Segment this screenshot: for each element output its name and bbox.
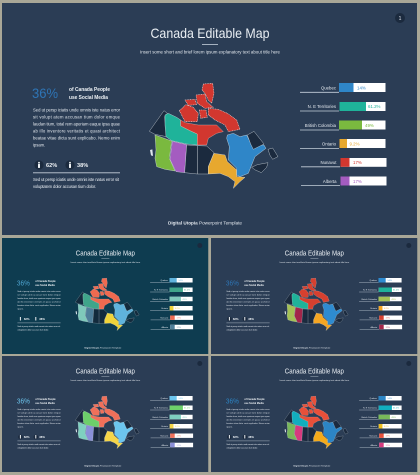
paragraph: Sed ut persp iciatis unde omnis iste natus error	[33, 108, 121, 112]
subtitle: Insert some short and brief lorem ipsum explanatory text about title here	[140, 50, 281, 54]
thumbnail paragraph: ab illo inventore veritatis et quasi architect	[226, 419, 270, 422]
map of Canada	[149, 83, 278, 188]
bar: N. E Territories	[300, 102, 386, 111]
panel: slide thumbnail vivid	[211, 356, 417, 472]
thumbnail bars	[359, 278, 402, 329]
thumbnail bars: 9.2%	[175, 426, 180, 428]
thumbnail paragraph: beatae vitae dicta sunt explicabo. Nemo enim	[226, 422, 270, 425]
thumbnail bars: 14%	[178, 280, 183, 282]
bar: British Colombia: 49%	[365, 123, 374, 128]
paragraph: laudan tium, total rem aperiam eaque ipsa quae	[33, 122, 121, 126]
thumbnail bars: British Colombia	[153, 416, 169, 419]
thumbnail bars: 9.2%	[384, 426, 389, 428]
thumbnail statistic	[226, 397, 265, 406]
thumbnail gender statistics	[20, 317, 45, 321]
panel: slide thumbnail vivid: Insert some short and brief lorem ipsum explanatory text about title here	[280, 379, 350, 382]
thumbnail title: Canada Editable Map	[76, 250, 135, 258]
thumbnail statistic: of Canada People	[35, 397, 56, 401]
thumbnail gender statistics: 62%	[24, 317, 30, 321]
panel: slide thumbnail teal: Sed ut persp iciatis unde omnis iste natus error sit	[17, 325, 61, 328]
page number badge	[395, 13, 405, 23]
bar: Nunavut	[301, 158, 386, 167]
thumbnail bars: 49%	[391, 417, 396, 419]
thumbnail bars: Quebec	[370, 280, 377, 282]
statistic: 36%: 36%	[32, 85, 58, 101]
thumbnail bars: 61.2%	[184, 289, 190, 292]
thumbnail bars: N. E Territories	[154, 288, 168, 292]
thumbnail paragraph: laudan tium, total rem aperiam eaque ipsa quae	[17, 297, 61, 300]
thumbnail paragraph: laudan tium, total rem aperiam eaque ipsa quae	[226, 415, 270, 418]
thumbnail bars: 49%	[182, 417, 187, 419]
thumbnail paragraph: Sed ut persp iciatis unde omnis iste natus error	[226, 408, 270, 411]
title: Canada Editable Map	[150, 25, 270, 41]
thumbnail statistic: 36%	[226, 398, 239, 406]
thumbnail bars: 49%	[391, 299, 396, 301]
thumbnail paragraph: beatae vitae dicta sunt explicabo. Nemo enim	[17, 422, 61, 425]
thumbnail statistic: use Social Media	[35, 283, 55, 287]
page number badge: 1	[399, 16, 402, 22]
thumbnail bars	[150, 278, 193, 329]
thumbnail map	[75, 396, 139, 449]
thumbnail bars: Nunavut	[369, 434, 378, 438]
panel: slide thumbnail vivid: voluptatem dolor accusan tium dolor.	[226, 446, 258, 450]
statistic: 36%: use Social Media	[69, 95, 108, 101]
bar: Ontario: 9.2%	[350, 142, 360, 146]
panel: slide thumbnail teal: voluptatem dolor accusan tium dolor.	[17, 328, 49, 332]
panel: slide thumbnail pastel: voluptatem dolor accusan tium dolor.	[17, 446, 49, 450]
thumbnail bars: 17%	[176, 435, 181, 438]
thumbnail bars: Nunavut	[160, 316, 169, 320]
statistic: 36%	[32, 85, 110, 101]
thumbnail footer: Digital Utopia Powerpoint Template	[85, 347, 122, 350]
thumbnail paragraph: ab illo inventore veritatis et quasi architect	[17, 301, 61, 304]
bar: Nunavut: Nunavut	[320, 160, 337, 165]
thumbnail paragraph: beatae vitae dicta sunt explicabo. Nemo enim	[17, 304, 61, 307]
thumbnail gender statistics: 38%	[39, 435, 45, 439]
thumbnail paragraph: sit volupt atem accusan tium dolor emque	[226, 412, 270, 415]
panel: slide thumbnail navy and maroon: voluptatem dolor accusan tium dolor.	[226, 328, 258, 332]
thumbnail bars: 49%	[182, 299, 187, 301]
thumbnail map	[284, 396, 348, 449]
thumbnail bars: Nunavut	[369, 316, 378, 320]
footnote text: voluptatem dolor accusan tium dolor.	[33, 184, 96, 189]
thumbnail paragraph: Sed ut persp iciatis unde omnis iste natus error	[17, 290, 61, 293]
thumbnail bars: 9.2%	[384, 308, 389, 310]
thumbnail paragraph: laudan tium, total rem aperiam eaque ipsa quae	[226, 297, 270, 300]
bar: Alberta: Alberta	[323, 179, 337, 184]
panel: slide thumbnail pastel: Sed ut persp iciatis unde omnis iste natus error sit	[17, 443, 61, 446]
panel: main slide	[2, 3, 417, 235]
thumbnail bars: N. E Territories	[363, 406, 377, 410]
thumbnail paragraph: ipsam.	[17, 309, 24, 311]
thumbnail paragraph	[226, 290, 270, 311]
thumbnail bars: Alberta	[371, 444, 378, 447]
thumbnail bars: British Colombia	[362, 298, 378, 301]
thumbnail paragraph: sit volupt atem accusan tium dolor emque	[226, 294, 270, 297]
thumbnail bars: 17%	[176, 445, 181, 447]
thumbnail paragraph: ipsam.	[17, 427, 24, 429]
thumbnail bars: 14%	[387, 398, 392, 400]
thumbnail paragraph: beatae vitae dicta sunt explicabo. Nemo enim	[226, 304, 270, 307]
thumbnail statistic	[17, 279, 56, 288]
thumbnail bars: 17%	[385, 435, 390, 438]
thumbnail statistic: of Canada People	[244, 397, 265, 401]
thumbnail statistic: 36%	[17, 280, 30, 288]
statistic: 36%: of Canada People	[69, 87, 110, 93]
thumbnail bars: Ontario	[161, 307, 169, 310]
thumbnail bars: 9.2%	[175, 308, 180, 310]
thumbnail paragraph: sit volupt atem accusan tium dolor emque	[17, 294, 61, 297]
thumbnail bars: Quebec	[161, 280, 168, 282]
thumbnail gender statistics: 62%	[233, 435, 239, 439]
thumbnail gender statistics: 38%	[248, 317, 254, 321]
thumbnail bars: 61.2%	[184, 407, 190, 410]
panel: slide thumbnail vivid: Sed ut persp iciatis unde omnis iste natus error sit	[226, 443, 270, 446]
panel: slide thumbnail navy and maroon	[211, 238, 417, 354]
thumbnail bars: Alberta	[162, 444, 169, 447]
thumbnail statistic: use Social Media	[35, 401, 55, 405]
thumbnail bars: Ontario	[161, 425, 169, 428]
thumbnail gender statistics: 62%	[233, 317, 239, 321]
thumbnail statistic: use Social Media	[244, 401, 264, 405]
bar list	[300, 83, 386, 186]
thumbnail bars: Ontario	[370, 425, 378, 428]
thumbnail paragraph: ipsam.	[226, 309, 233, 311]
thumbnail bars: 17%	[385, 327, 390, 329]
thumbnail map	[75, 278, 139, 331]
thumbnail title: Canada Editable Map	[285, 368, 344, 376]
footnote text: Sed ut persp iciatis unde omnis iste natus error sit	[33, 177, 120, 182]
panel: slide thumbnail navy and maroon: Sed ut persp iciatis unde omnis iste natus error sit	[226, 325, 270, 328]
thumbnail paragraph	[226, 408, 270, 429]
thumbnail bars: N. E Territories	[363, 288, 377, 292]
paragraph	[33, 108, 121, 148]
panel: slide thumbnail pastel	[2, 356, 208, 472]
thumbnail title: Canada Editable Map	[285, 250, 344, 258]
thumbnail footer: Digital Utopia Powerpoint Template	[294, 465, 331, 468]
thumbnail bars	[359, 396, 402, 447]
bar: Alberta: 17%	[353, 179, 362, 184]
thumbnail footer: Digital Utopia Powerpoint Template	[85, 465, 122, 468]
bar: British Colombia: British Colombia	[305, 123, 337, 128]
bar: Ontario	[300, 139, 386, 148]
thumbnail statistic: 36%	[17, 398, 30, 406]
thumbnail bars: 17%	[385, 317, 390, 320]
thumbnail paragraph: laudan tium, total rem aperiam eaque ipsa quae	[17, 415, 61, 418]
bar: Ontario: Ontario	[322, 142, 337, 146]
thumbnail bars: Nunavut	[160, 434, 169, 438]
thumbnail gender statistics	[227, 435, 254, 439]
thumbnail paragraph	[17, 290, 61, 311]
thumbnail bars: 17%	[385, 445, 390, 447]
paragraph: ipsam.	[33, 142, 45, 148]
gender statistics: 62%	[46, 163, 57, 169]
thumbnail bars: British Colombia	[362, 416, 378, 419]
thumbnail bars: Ontario	[370, 307, 378, 310]
gender statistics: 38%	[77, 163, 88, 169]
panel: slide thumbnail teal	[2, 238, 208, 354]
thumbnail bars	[150, 396, 193, 447]
footnote text	[33, 177, 120, 189]
thumbnail bars: 17%	[176, 327, 181, 329]
bar: N. E Territories: 61.2%	[368, 104, 381, 109]
thumbnail statistic	[226, 279, 265, 288]
paragraph: ab illo inventore veritatis et quasi architect	[33, 128, 121, 134]
thumbnail statistic	[17, 397, 56, 406]
paragraph: beatae vitae dicta sunt explicabo. Nemo enim	[33, 136, 120, 140]
thumbnail footer: Digital Utopia Powerpoint Template	[294, 347, 331, 350]
bar: Quebec: Quebec	[321, 86, 337, 90]
thumbnail statistic: use Social Media	[244, 283, 264, 287]
thumbnail bars: Alberta	[371, 326, 378, 329]
thumbnail bars: N. E Territories	[154, 406, 168, 410]
thumbnail paragraph: ab illo inventore veritatis et quasi architect	[226, 301, 270, 304]
thumbnail bars: British Colombia	[153, 298, 169, 301]
thumbnail bars: Quebec	[161, 398, 168, 400]
thumbnail paragraph: Sed ut persp iciatis unde omnis iste natus error	[17, 408, 61, 411]
bar: Quebec: 14%	[357, 86, 366, 90]
thumbnail paragraph	[17, 408, 61, 429]
thumbnail bars: 61.2%	[393, 289, 399, 292]
thumbnail statistic: 36%	[226, 280, 239, 288]
bar: Alberta	[301, 176, 386, 186]
bar: N. E Territories: N. E Territories	[308, 104, 336, 109]
thumbnail gender statistics: 62%	[24, 435, 30, 439]
thumbnail gender statistics: 38%	[39, 317, 45, 321]
thumbnail title: Canada Editable Map	[76, 368, 135, 376]
thumbnail statistic: of Canada People	[35, 279, 56, 283]
thumbnail bars: Quebec	[370, 398, 377, 400]
thumbnail statistic: of Canada People	[244, 279, 265, 283]
thumbnail paragraph: Sed ut persp iciatis unde omnis iste natus error	[226, 290, 270, 293]
thumbnail bars: Alberta	[162, 326, 169, 329]
thumbnail paragraph: sit volupt atem accusan tium dolor emque	[17, 412, 61, 415]
thumbnail gender statistics	[18, 435, 45, 439]
gender statistics	[34, 160, 88, 170]
panel: slide thumbnail pastel: Insert some short and brief lorem ipsum explanatory text about title here	[71, 379, 141, 382]
thumbnail bars: 61.2%	[393, 407, 399, 410]
thumbnail bars: 17%	[176, 317, 181, 320]
panel: slide thumbnail navy and maroon: Insert some short and brief lorem ipsum explanatory text about title here	[280, 261, 350, 264]
thumbnail gender statistics: 38%	[248, 435, 254, 439]
footer: Digital Utopia Powerpoint Template	[168, 220, 243, 226]
thumbnail paragraph: ab illo inventore veritatis et quasi architect	[17, 419, 61, 422]
bar: Nunavut: 17%	[353, 160, 362, 165]
bar: British Colombia	[300, 120, 386, 130]
thumbnail bars: 14%	[178, 398, 183, 400]
thumbnail gender statistics	[227, 317, 254, 321]
bar: Quebec	[300, 83, 386, 92]
paragraph: sit volupt atem accusan tium dolor emque	[33, 114, 121, 120]
thumbnail paragraph: ipsam.	[226, 427, 233, 429]
thumbnail bars: 14%	[387, 280, 392, 282]
panel: slide thumbnail teal: Insert some short and brief lorem ipsum explanatory text about title here	[71, 261, 141, 264]
thumbnail map	[284, 278, 348, 331]
